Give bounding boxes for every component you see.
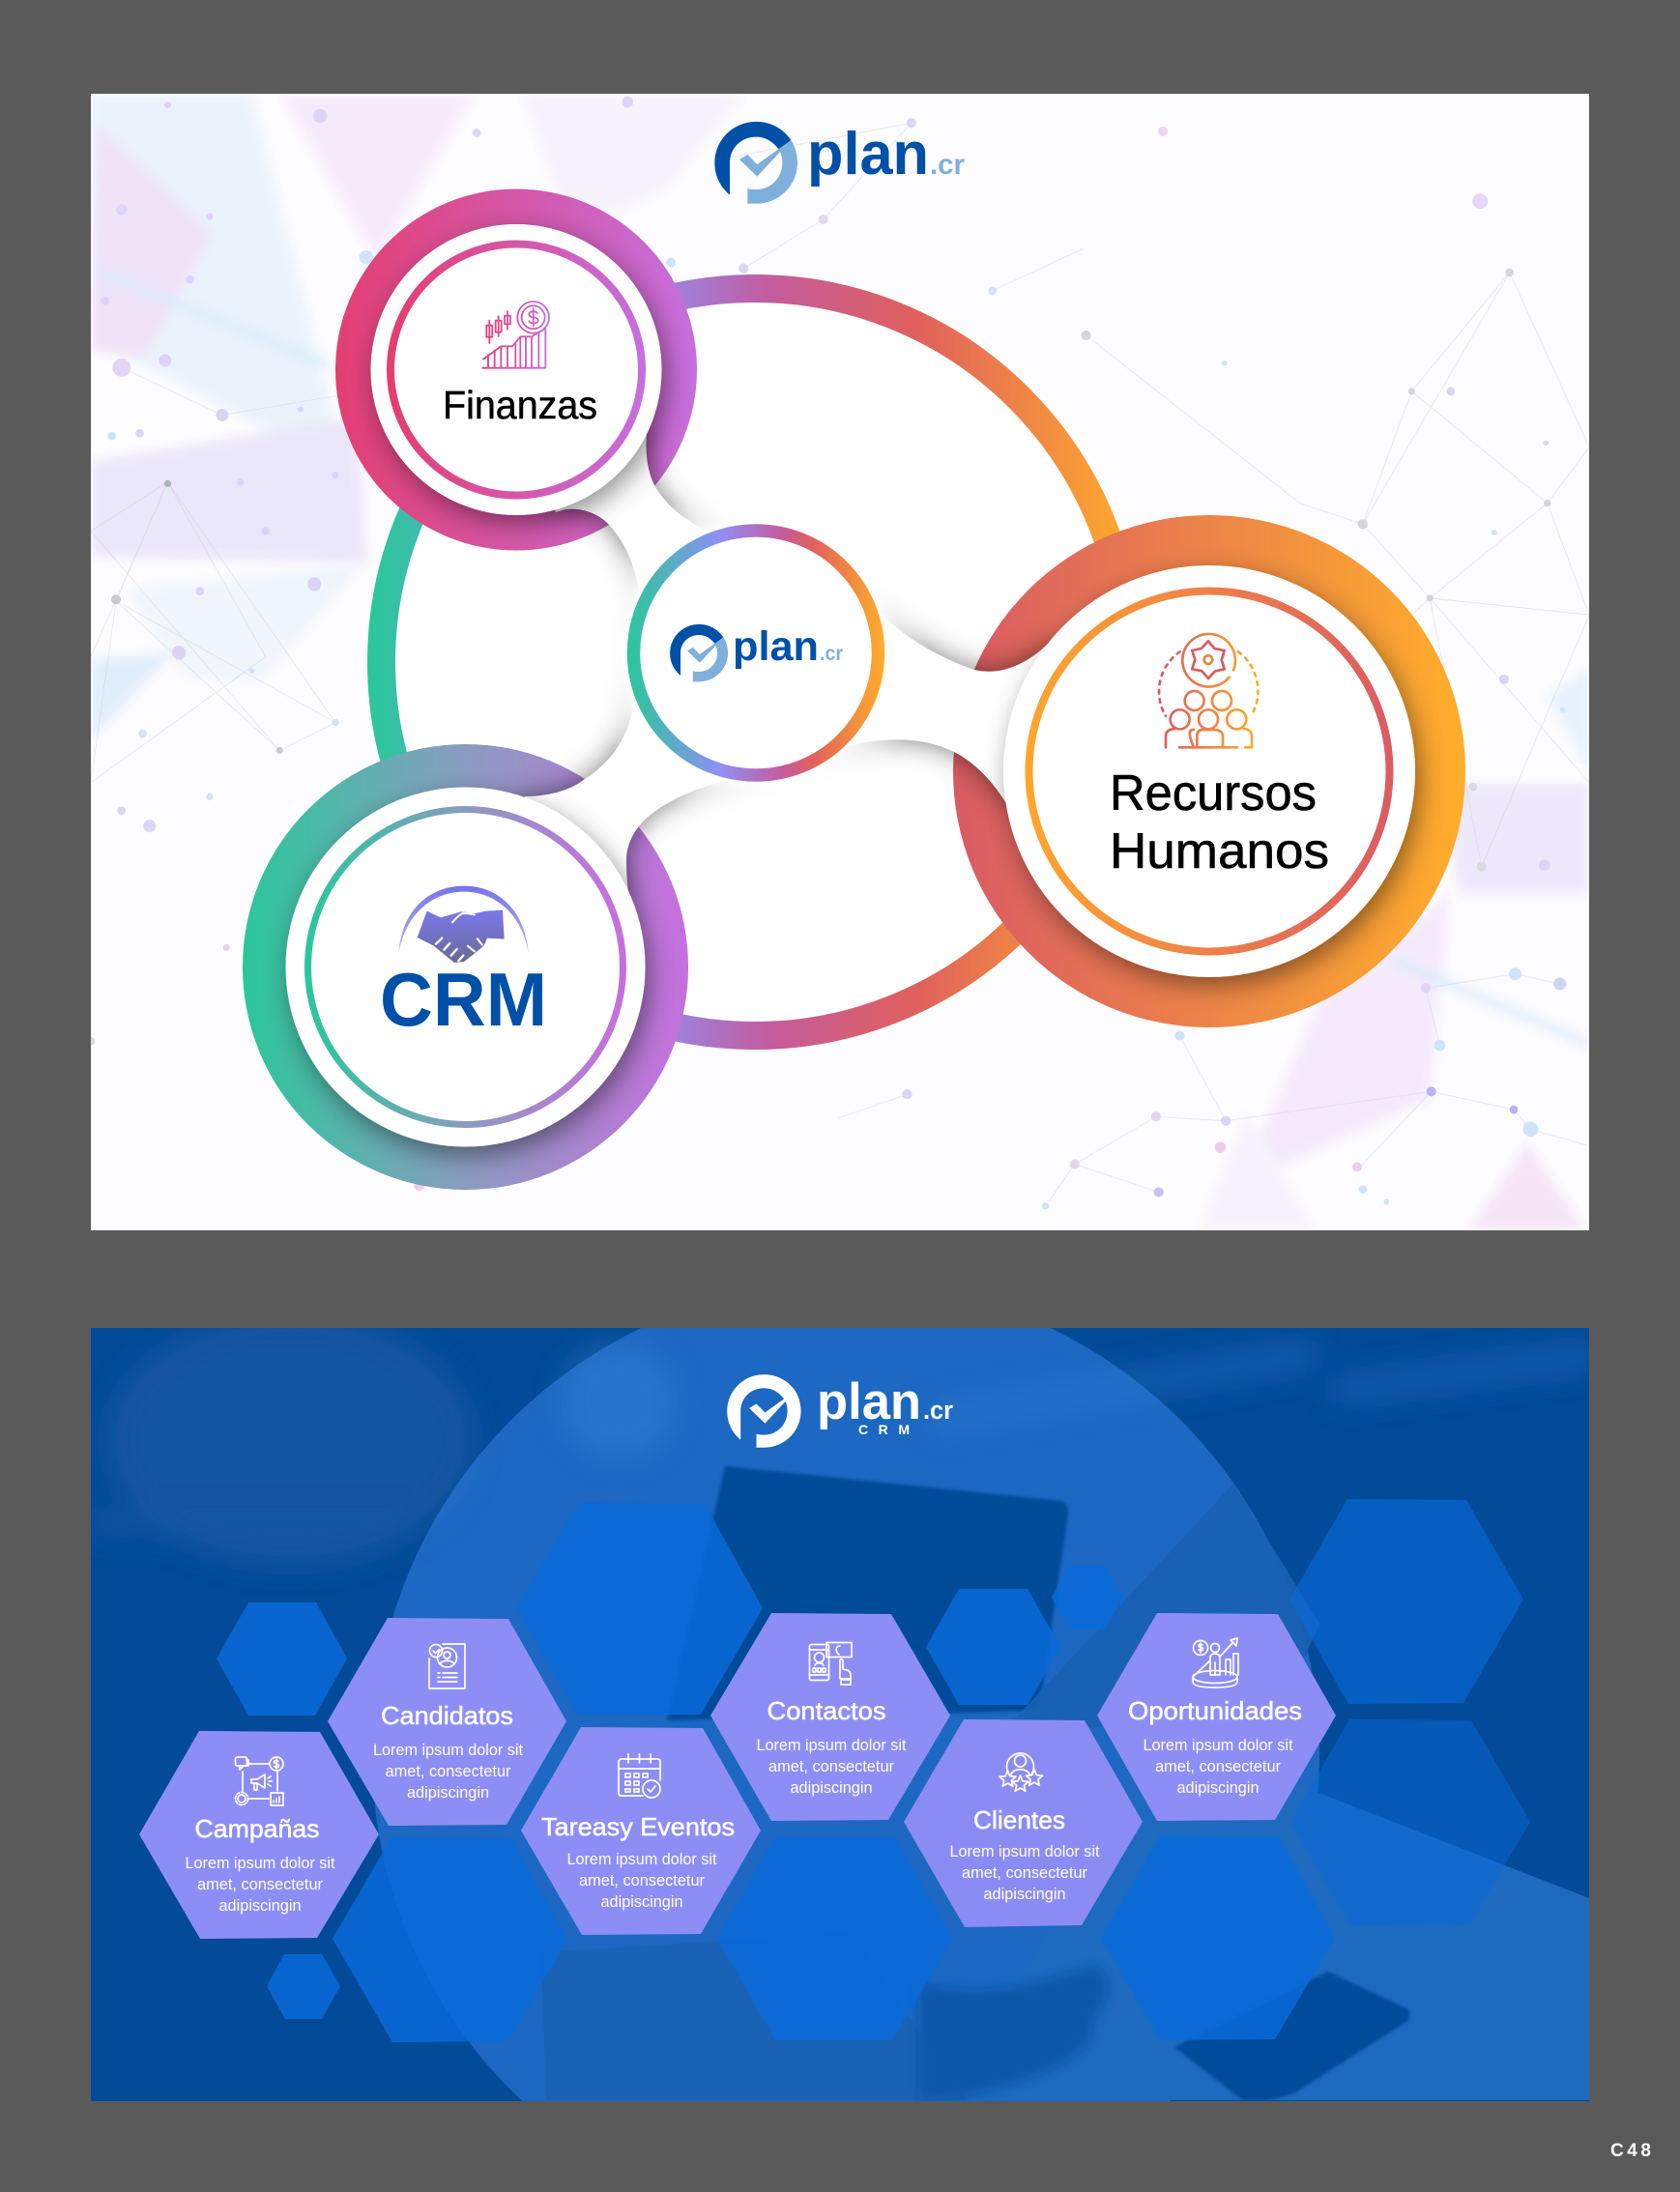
hexagon: Campañas [139,1731,379,1939]
panel: top diagram [87,94,1589,1230]
logo: top: .cr [930,149,965,181]
logo: white: plan [817,1373,921,1430]
hexagon: Oportunidades: adipiscingin [1177,1779,1259,1797]
title: Oportunidades: Oportunidades [1128,1696,1302,1725]
icon: opportunities [1193,1638,1238,1687]
hexagon: Campañas: amet, consectetur [197,1876,323,1893]
hexagon: Candidatos: amet, consectetur [385,1763,511,1780]
hexagon: Candidatos: adipiscingin [407,1784,489,1802]
photo: table [967,1720,1589,2100]
big ring [381,288,1129,1036]
icon: handshake [399,886,529,963]
logo: white: CRM [858,1422,910,1437]
card: recursos humanos: Humanos [1110,823,1329,880]
corner code label: C48 [1610,2141,1651,2161]
icon: client rating [999,1753,1043,1791]
text: Candidatos body: Lorem ipsum dolor sit [373,1742,523,1759]
label: Finanzas: Finanzas [443,383,597,427]
hexagon: Contactos: adipiscingin [791,1779,872,1797]
card: finanzas [371,224,661,515]
card: crm [286,787,646,1146]
hexagon: Campañas: adipiscingin [218,1897,302,1915]
panel: bottom hexagons [91,1328,1589,2101]
card: recursos humanos [1003,565,1415,977]
hexagon: Tareasy Eventos [521,1727,761,1935]
center circle with logo [634,531,878,775]
logo: top [714,121,965,204]
photo: laptop [667,1466,1068,1720]
text: Oportunidades body: Lorem ipsum dolor sit [1143,1737,1293,1754]
photo: phone [1174,1972,1409,2102]
hexagon: Candidatos [328,1618,566,1826]
hexagon: Tareasy Eventos: adipiscingin [601,1893,682,1911]
text: Clientes body: Lorem ipsum dolor sit [949,1843,1100,1860]
icon: contact phone [810,1643,852,1685]
title: Campañas: Campañas [195,1814,319,1843]
hexagon: Clientes: amet, consectetur [962,1864,1087,1882]
hexagon: Oportunidades [1097,1613,1336,1821]
icon: team and gear [1159,634,1258,747]
text: Tareasy Eventos body: Lorem ipsum dolor sit [566,1851,717,1868]
title: Clientes: Clientes [973,1805,1065,1834]
hexagon: Contactos: amet, consectetur [768,1758,894,1775]
icon: candidate document [429,1644,465,1688]
center circle with logo: .cr [820,643,843,665]
hexagon: Contactos [710,1613,950,1821]
colored disc: crm [243,744,688,1190]
label: CRM: CRM [380,957,547,1042]
hexagon: Tareasy Eventos: amet, consectetur [579,1872,705,1889]
text: Campañas body: Lorem ipsum dolor sit [186,1855,335,1872]
title: Tareasy Eventos: Tareasy Eventos [541,1812,735,1841]
icon: finance chart [482,302,549,368]
colored disc: recursos humanos [953,515,1465,1027]
hexagon: Oportunidades: amet, consectetur [1155,1758,1281,1775]
colored disc: finanzas [335,189,697,551]
title: Candidatos: Candidatos [381,1701,513,1730]
photo: hand [918,1968,1108,2100]
icon: center logo mark [670,624,728,681]
icon: campaigns [236,1757,283,1805]
photo approximation [91,1314,1596,1566]
hexagon: Clientes [904,1719,1143,1927]
text: center logo wordmark: plan [733,623,819,670]
icon: calendar [619,1754,660,1798]
logo: white [727,1373,953,1448]
logo: white: .cr [923,1396,953,1425]
text: Contactos body: Lorem ipsum dolor sit [756,1737,907,1754]
background hexagons [217,1499,1530,2042]
central white connector [512,423,1055,904]
title: Contactos: Contactos [768,1696,885,1725]
logo: top: plan [807,121,929,187]
label: Recursos Humanos: Recursos [1110,765,1317,822]
hexagon: Clientes: adipiscingin [984,1886,1065,1903]
